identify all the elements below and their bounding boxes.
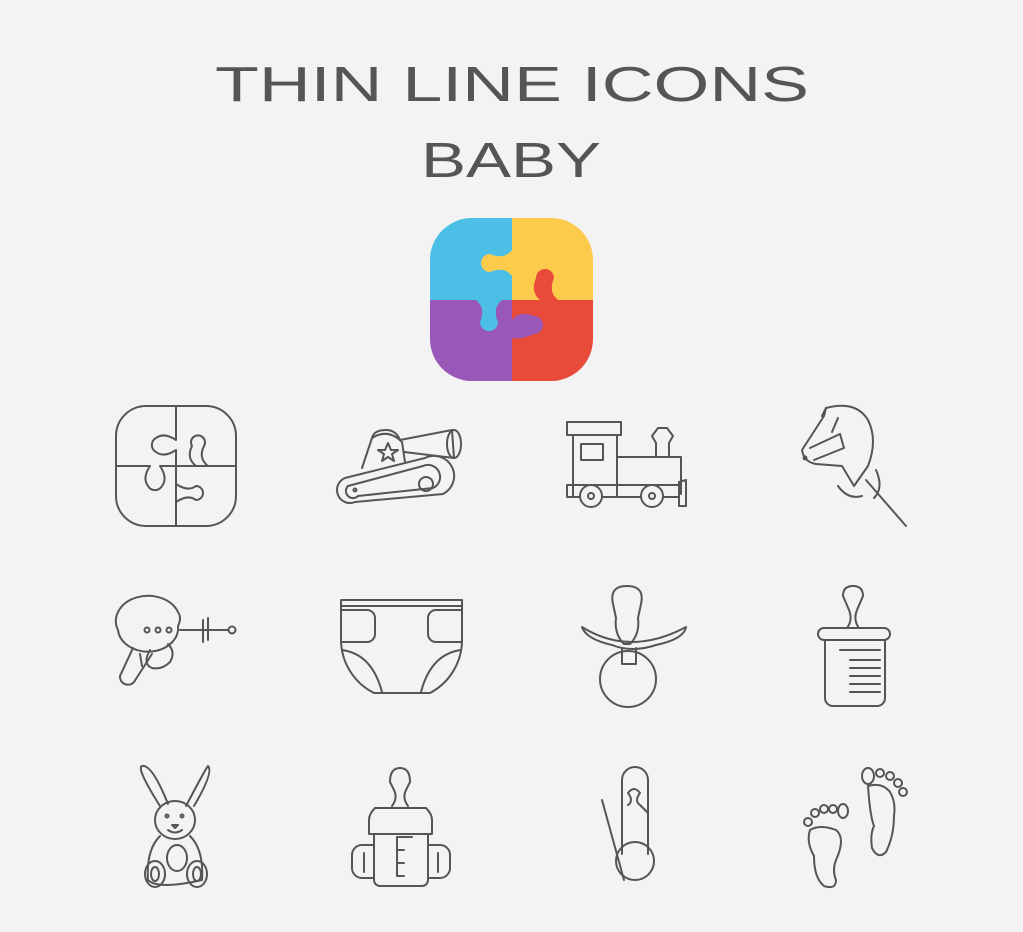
- icon: tank: [337, 430, 461, 503]
- icon: train: [567, 422, 686, 507]
- icon: colored puzzle: [430, 218, 594, 382]
- title: THIN LINE ICONS: [215, 58, 809, 112]
- title: [215, 58, 809, 188]
- icon: footprints: [804, 768, 907, 887]
- icon: diaper: [341, 600, 462, 693]
- icon: baby bottle: [818, 586, 890, 706]
- title: BABY: [421, 134, 601, 188]
- icon: bunny: [141, 766, 209, 887]
- icon: hobby horse: [802, 406, 906, 526]
- icon: ray gun: [116, 596, 236, 685]
- icon: puzzle outline: [116, 406, 236, 526]
- icon: pacifier: [582, 586, 686, 707]
- icon: safety pin: [602, 767, 654, 880]
- icon: sippy cup: [352, 768, 450, 886]
